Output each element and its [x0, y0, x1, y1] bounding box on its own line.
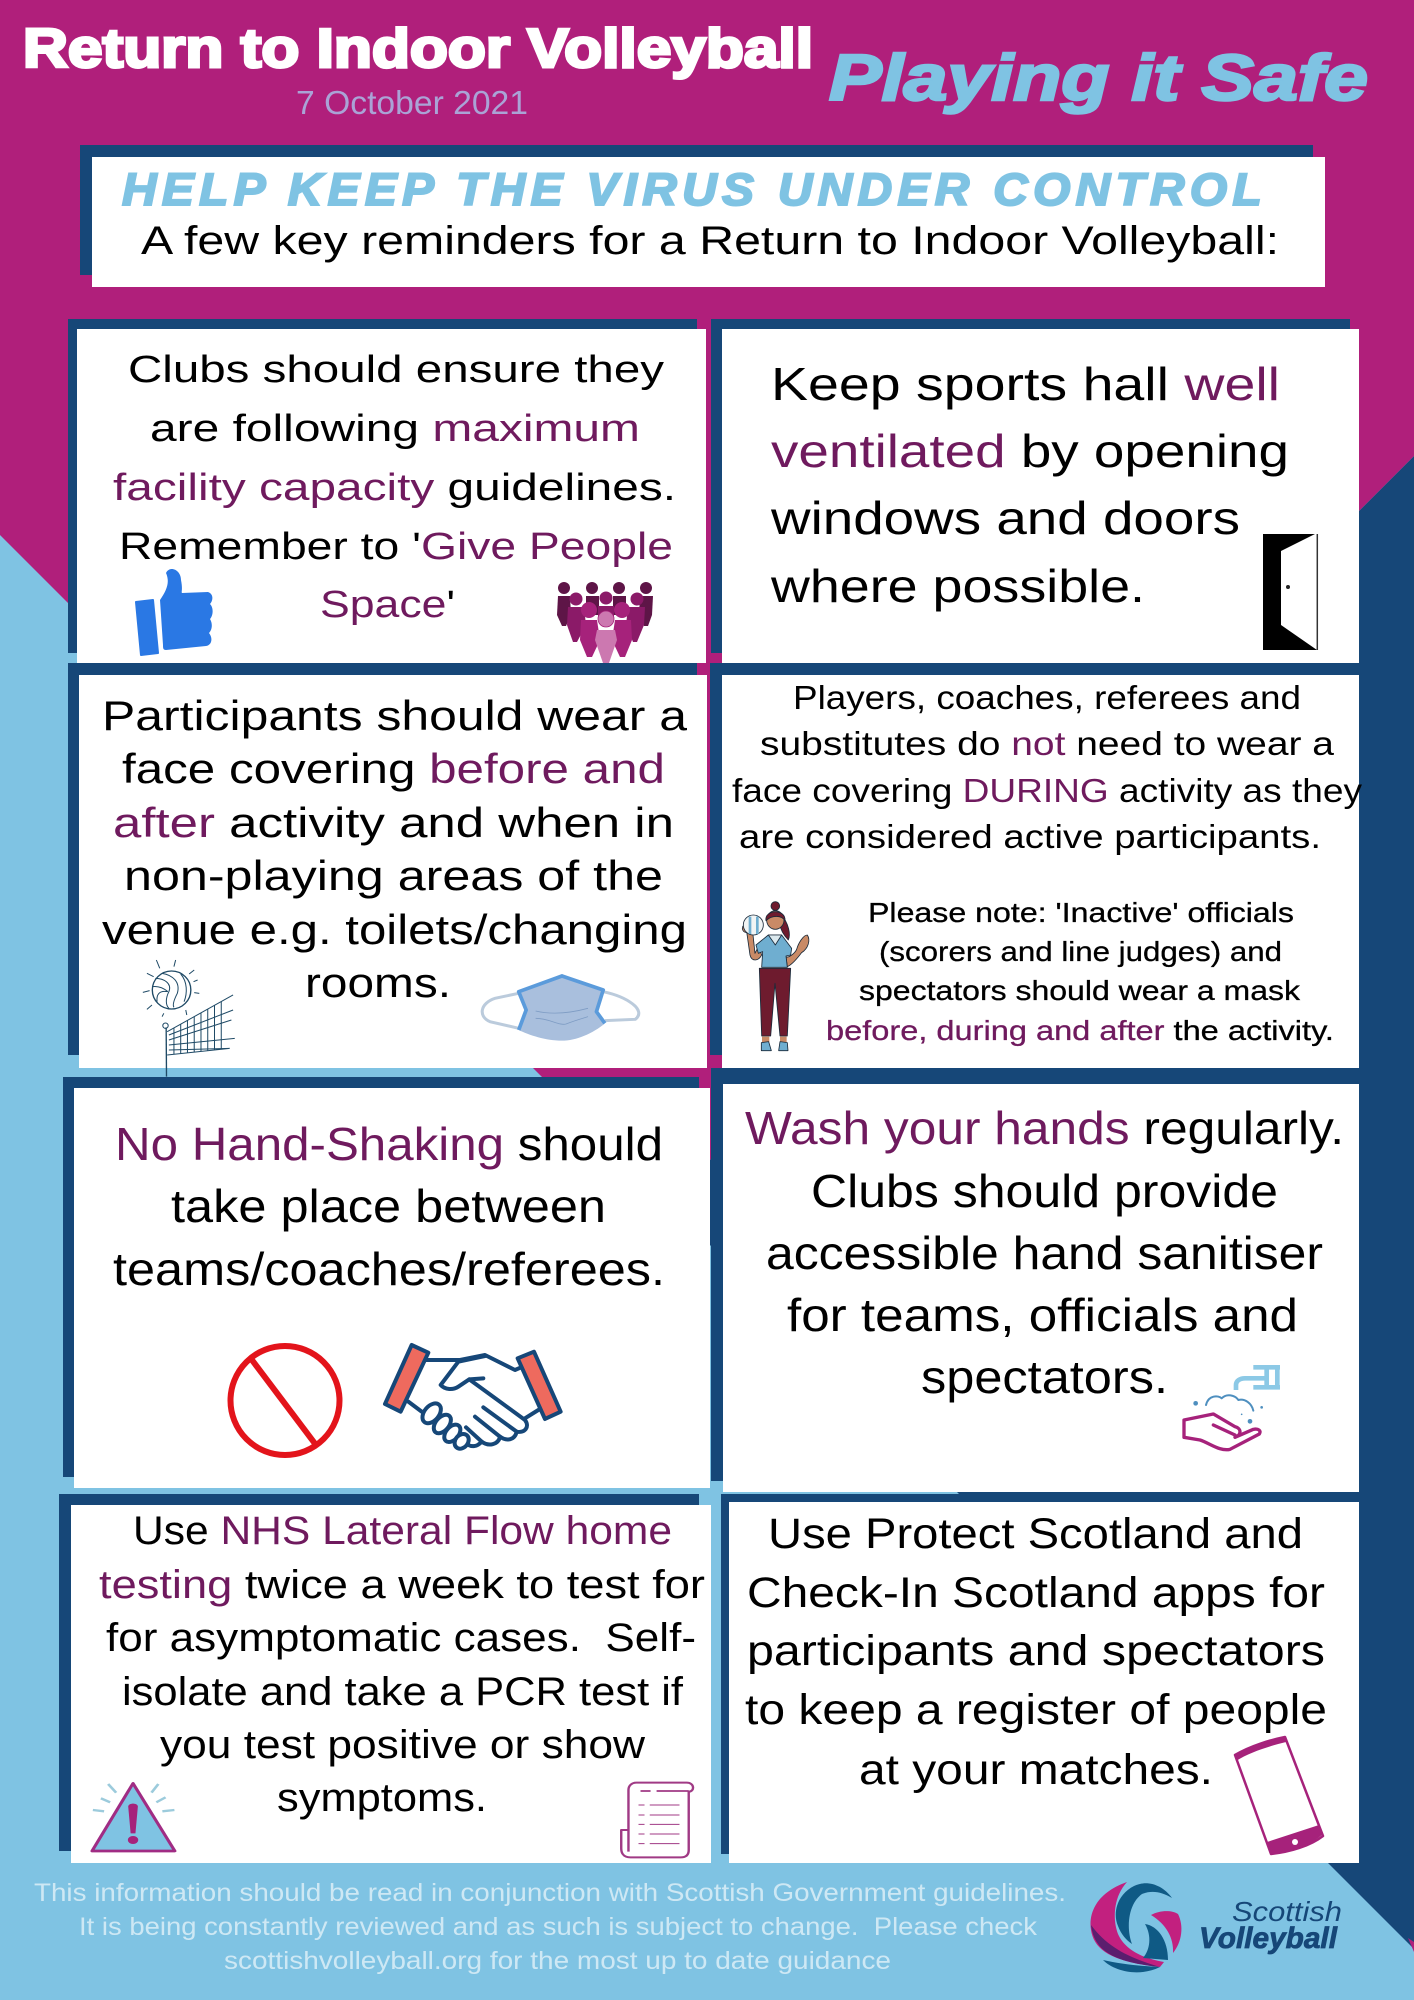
text: contact tracing apps: to keep a register of people	[745, 1686, 1327, 1734]
text: note on inactive officials: (scorers and line judges) and	[879, 936, 1282, 967]
footer note: This information should be read in conjunction with Scottish Government guidelines.	[34, 1879, 1066, 1907]
footer note: scottishvolleyball.org for the most up to date guidance	[224, 1947, 891, 1975]
text: face coverings: after activity and when in	[113, 799, 674, 846]
text: ventilation: ventilated by opening	[771, 425, 1289, 477]
text: face coverings: rooms.	[305, 959, 451, 1006]
text: no hand-shaking	[113, 1118, 665, 1295]
icon: warning triangle	[92, 1783, 175, 1851]
panel: intro banner	[80, 145, 1325, 287]
text: lateral flow testing: symptoms.	[277, 1776, 487, 1820]
text: note on inactive officials: before, during and after the activity.	[826, 1015, 1334, 1046]
icon: open door	[1263, 534, 1318, 650]
icon: volleyball and net	[143, 960, 235, 1077]
icon: washing hands under tap	[1184, 1367, 1280, 1450]
panel: active participants	[710, 663, 1363, 1068]
text: lateral flow testing: you test positive or show	[160, 1723, 645, 1767]
text: facility capacity: Remember to ' Give People	[119, 526, 673, 568]
text: no hand-shaking: teams/coaches/referees.	[113, 1243, 665, 1295]
text: no hand-shaking: No Hand-Shaking should	[115, 1118, 663, 1170]
footer note: It is being constantly reviewed and as such is subject to change. Please check	[79, 1913, 1038, 1941]
text: ventilation: Keep sports hall well	[771, 358, 1280, 410]
text: note on inactive officials: Please note: 'Inactive' officials	[868, 897, 1294, 928]
text: face coverings: face covering before and	[122, 745, 665, 792]
text: contact tracing apps	[745, 1510, 1327, 1794]
text: no hand-shaking: take place between	[171, 1180, 606, 1232]
text: facility capacity: Clubs should ensure they	[128, 349, 664, 391]
text: active participants: substitutes do not need to wear a	[760, 725, 1335, 762]
title: Return to Indoor Volleyball	[23, 17, 813, 79]
text: contact tracing apps: Check-In Scotland apps for	[747, 1569, 1325, 1617]
text: lateral flow testing	[99, 1509, 705, 1820]
footer note	[34, 1879, 1066, 1975]
text: ventilation: windows and doors	[770, 492, 1240, 544]
text: hand washing: accessible hand sanitiser	[766, 1227, 1323, 1279]
panel: contact tracing apps	[721, 1494, 1359, 1863]
logo wordmark: Scottish	[1232, 1896, 1342, 1927]
panel: lateral flow testing	[59, 1494, 711, 1863]
text: hand washing: Clubs should provide	[811, 1165, 1278, 1217]
icon: document scroll	[621, 1783, 693, 1857]
text: face coverings: non-playing areas of the	[124, 852, 663, 899]
subtitle: Playing it Safe	[829, 41, 1368, 114]
text: hand washing	[745, 1102, 1344, 1403]
panel: hand washing	[711, 1068, 1359, 1492]
panel: ventilation	[711, 319, 1359, 663]
text: active participants: are considered active participants.	[739, 818, 1321, 855]
icon: group of people	[557, 582, 653, 663]
panel: no hand-shaking	[63, 1077, 710, 1488]
text: facility capacity: Space '	[320, 584, 455, 626]
panel: face coverings	[68, 663, 707, 1077]
text: lateral flow testing: for asymptomatic cases. Self-	[106, 1616, 696, 1660]
logo: Scottish Volleyball	[1090, 1882, 1342, 1972]
date: 7 October 2021	[296, 84, 528, 121]
icon: smartphone	[1235, 1737, 1323, 1854]
icon: referee figure	[742, 902, 809, 1051]
panel: facility capacity	[68, 319, 706, 663]
text: hand washing: Wash your hands regularly.	[745, 1102, 1344, 1154]
text: note on inactive officials: spectators should wear a mask	[859, 975, 1301, 1006]
text: hand washing: spectators.	[921, 1351, 1168, 1403]
text: ventilation	[770, 358, 1289, 612]
text: facility capacity	[113, 349, 676, 626]
text: active participants: Players, coaches, referees and	[793, 679, 1301, 716]
text: face coverings	[102, 692, 688, 1006]
text: face coverings: venue e.g. toilets/changing	[102, 906, 687, 953]
text: contact tracing apps: Use Protect Scotland and	[768, 1510, 1303, 1558]
icon: face mask	[482, 974, 639, 1041]
logo mark	[1090, 1882, 1181, 1972]
icon: thumbs up	[136, 569, 213, 655]
banner subheading: A few key reminders for a Return to Indoor Volleyball:	[141, 219, 1279, 263]
banner heading: HELP KEEP THE VIRUS UNDER CONTROL	[122, 164, 1267, 215]
logo: Scottish Volleyball: Volleyball	[1199, 1922, 1338, 1955]
icon: handshake	[385, 1345, 561, 1452]
text: facility capacity: facility capacity guidelines.	[113, 467, 676, 509]
text: contact tracing apps: participants and spectators	[747, 1627, 1325, 1675]
text: lateral flow testing: isolate and take a PCR test if	[122, 1670, 684, 1714]
text: ventilation: where possible.	[770, 560, 1145, 612]
text: active participants: face covering DURING activity as they	[732, 772, 1363, 809]
text: lateral flow testing: testing twice a week to test for	[99, 1563, 705, 1607]
text: contact tracing apps: at your matches.	[859, 1746, 1213, 1794]
text: face coverings: Participants should wear a	[102, 692, 688, 739]
text: note on inactive officials	[826, 897, 1334, 1046]
text: lateral flow testing: Use NHS Lateral Flow home	[133, 1509, 672, 1553]
text: active participants	[732, 679, 1363, 855]
text: facility capacity: are following maximum	[150, 408, 640, 450]
icon: prohibition sign	[230, 1346, 340, 1455]
text: hand washing: for teams, officials and	[787, 1289, 1298, 1341]
